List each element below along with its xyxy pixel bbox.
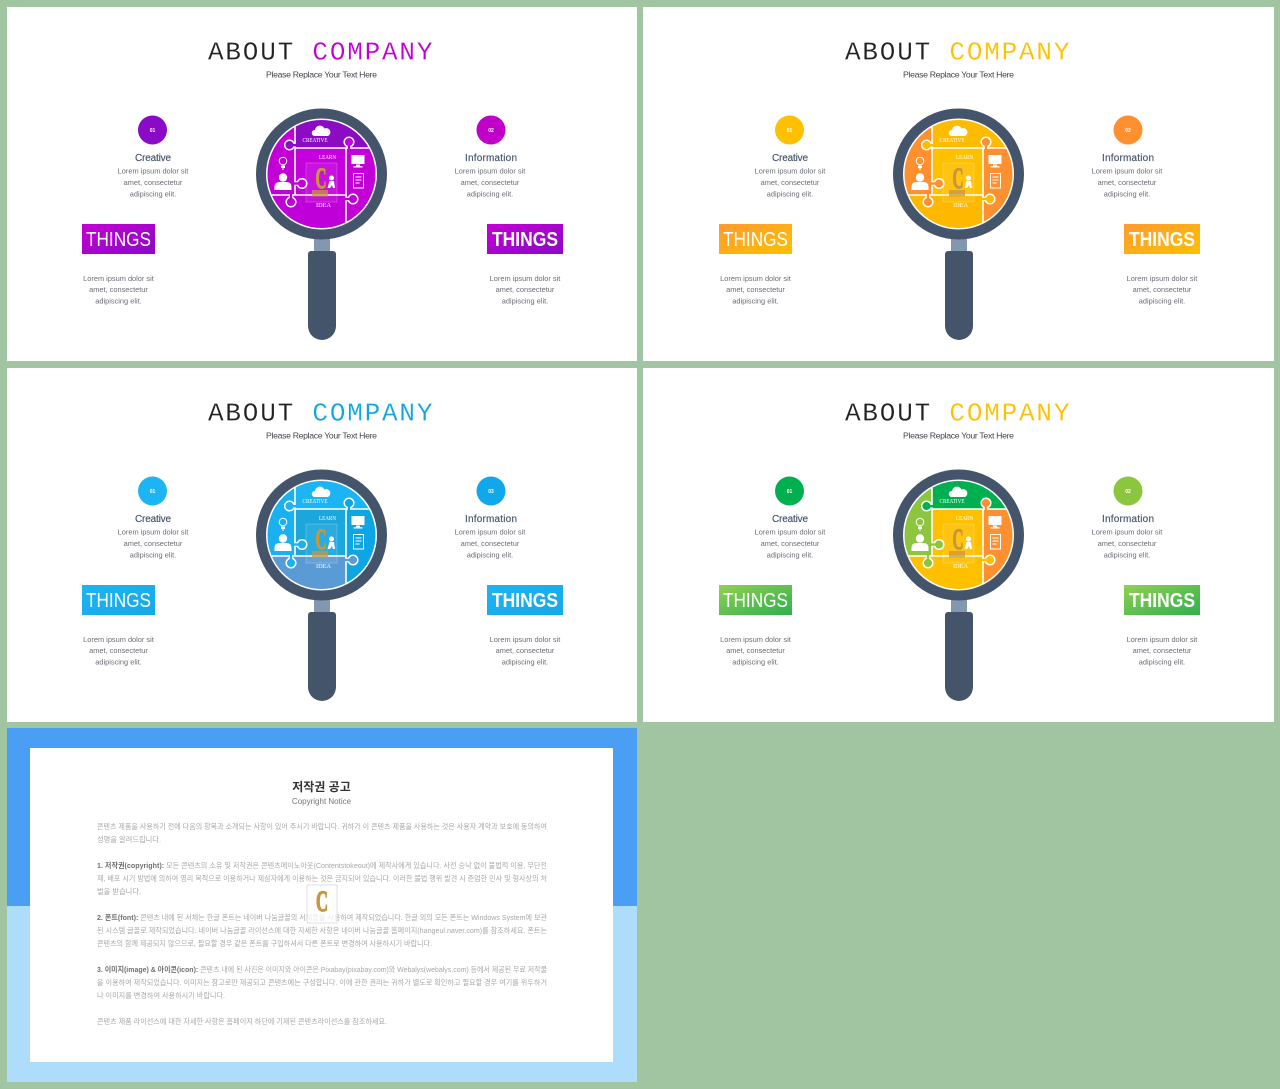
closing note: 콘텐츠 제품 라이선스에 대한 자세한 사항은 홈페이지 하단에 기재된 콘텐츠라이선스를 참조하세요. [97,1016,387,1026]
badge 01: 01 [150,489,155,495]
text block: creative: amet, consectetur [761,178,820,187]
badge 01 [775,116,804,144]
text block: creative: Lorem ipsum dolor sit [755,166,825,176]
things label left [82,585,155,615]
text block: lower left: amet, consectetur [726,646,785,655]
magnifier with puzzle: CREATIVE [302,138,328,144]
subtitle: Please Replace Your Text Here [266,430,377,440]
badge 02: 02 [488,128,494,134]
section 1 copyright: 재, 배포 시기 방법에 의하여 영리 목적으로 이용하거나 제삼자에게 이용하는 것은 금지되어 있습니다. 이러한 불법 행위 발견 시 준엄한 민사 및 형사상의 처 [97,873,547,883]
text block: lower left [720,635,791,666]
notice intro: 콘텐츠 제품을 사용하기 전에 다음의 항목과 소개되는 사항이 있어 주시기 바랍니다. 귀하가 이 콘텐츠 제품을 사용하는 것은 사용자 계약과 보호에 동의하여 [97,821,547,831]
things label left: THINGS [86,229,151,251]
things label right [1124,585,1200,615]
things label left [719,585,792,615]
things label right: THINGS [492,590,558,612]
text block: lower left: adipiscing elit. [732,296,779,306]
magnifier with puzzle: CREATIVE [940,499,965,505]
text block: creative [118,514,188,560]
text block: information: adipiscing elit. [1104,190,1150,198]
magnifier with puzzle [261,114,386,340]
section 2 font [97,912,547,948]
magnifier with puzzle: LEARN [956,155,974,161]
badge 01: 01 [150,128,155,134]
text block: information: Lorem ipsum dolor sit [1092,166,1162,176]
section 3 image and icon: 나 이미지를 변경하여 사용하시기 바랍니다. [97,990,225,1000]
magnifier with puzzle: C [953,523,963,556]
subtitle: Please Replace Your Text Here [266,70,377,80]
text block: lower right: adipiscing elit. [1139,296,1185,306]
text block: lower left: Lorem ipsum dolor sit [83,635,154,644]
badge 02: 02 [1125,128,1131,134]
section 2 font: 된 시스템 글꼴로 제작되었습니다. 네이버 나눔글꼴 라이선스에 대한 자세한 사항은 네이버 나눔글꼴 홈페이지(hangeul.naver.com)를 참조하세요. 폰트는 [97,925,547,935]
text block: lower right [1127,274,1197,306]
text block: lower right [490,635,560,666]
text block: lower left: adipiscing elit. [95,658,142,666]
text block: lower right: amet, consectetur [496,285,555,294]
section 1 copyright [97,860,547,896]
things label right [487,585,563,615]
text block: lower left [83,274,154,306]
text block: creative: adipiscing elit. [130,550,176,560]
text block: lower right [490,274,560,306]
badge 02: 03 [488,489,494,495]
magnifier with puzzle: LEARN [319,516,337,522]
text block: creative: adipiscing elit. [767,550,813,560]
section 2 font: 2. 폰트(font): 콘텐츠 내에 된 서체는 한글 폰트는 네이버 나눔글꼴의 서체들을 사용하여 제작되었습니다. 한글 외의 모든 폰트는 Windows System에 보관 [97,912,547,922]
section 3 image and icon: 을 이용하여 제작되었습니다. 이미지는 참고로만 제공되고 콘텐츠에는 구성합니다. 이에 관한 권리는 귀하가 별도로 확인하고 필요할 경우 여기를 위두하거 [97,977,547,987]
magnifier with puzzle: IDEA [953,203,969,209]
text block: information: adipiscing elit. [467,190,513,198]
subtitle: Please Replace Your Text Here [903,430,1014,440]
text block: creative: amet, consectetur [761,539,820,548]
text block: lower right [1127,635,1197,666]
magnifier with puzzle [261,474,386,701]
magnifier with puzzle: CREATIVE [940,138,965,144]
text block: creative [755,514,825,560]
text block: lower left [83,635,154,666]
magnifier with puzzle [898,114,1023,340]
text block: creative: Creative [135,514,171,525]
text block: creative: Lorem ipsum dolor sit [755,528,825,536]
text block: lower left: Lorem ipsum dolor sit [83,274,154,283]
badge 02: 02 [1125,489,1131,495]
badge 01: 01 [787,489,792,495]
text block: creative [755,153,825,198]
magnifier with puzzle: LEARN [319,155,337,161]
notice heading: 저작권 공고 [292,779,351,794]
text block: information [1092,514,1162,560]
text block: information: adipiscing elit. [1104,550,1150,560]
magnifier with puzzle: LEARN [956,516,974,522]
things label left [82,224,155,254]
title: ABOUT COMPANY [208,398,434,428]
section 1 copyright: 벌을 받습니다. [97,886,141,896]
badge 02 [476,476,506,506]
text block: lower right: amet, consectetur [496,646,555,655]
magnifier with puzzle: IDEA [953,564,969,570]
badge 01 [138,476,167,506]
things label left: THINGS [723,229,788,251]
text block: lower left: amet, consectetur [89,285,148,294]
panel: copyright notice [7,728,637,1082]
text block: lower right: amet, consectetur [1133,285,1192,294]
things label right: THINGS [1129,229,1195,251]
text block: creative: Lorem ipsum dolor sit [118,528,188,536]
notice intro: 성명을 알려드립니다. [97,834,161,844]
notice intro [97,821,547,844]
magnifier with puzzle: IDEA [316,564,332,570]
things label right [487,224,563,254]
text block: lower right: Lorem ipsum dolor sit [490,274,560,283]
text block: creative: adipiscing elit. [130,190,176,198]
text block: information: Lorem ipsum dolor sit [455,528,525,536]
text block: information: amet, consectetur [1098,178,1157,187]
logo watermark [307,885,337,923]
text block: lower right: amet, consectetur [1133,646,1192,655]
notice subheading: Copyright Notice [292,797,352,806]
text block: information: Information [465,153,517,164]
magnifier with puzzle: C [316,162,326,195]
badge 02 [1114,476,1142,506]
text block: creative: amet, consectetur [124,178,183,187]
text block: lower right: adipiscing elit. [502,296,548,306]
text block: creative [118,153,188,198]
text block: lower right: adipiscing elit. [1139,658,1185,666]
text block: lower left: amet, consectetur [726,285,785,294]
slide 3: blue [7,368,637,722]
text block: information: amet, consectetur [461,539,520,548]
text block: information: amet, consectetur [461,178,520,187]
badge 01: 01 [787,128,792,134]
text block: information [455,153,525,198]
text block: creative: adipiscing elit. [767,190,813,198]
text block: lower right: Lorem ipsum dolor sit [490,635,560,644]
text block: lower left: amet, consectetur [89,646,148,655]
text block: information: amet, consectetur [1098,539,1157,548]
text block: lower left: Lorem ipsum dolor sit [720,635,791,644]
slide 2: orange and yellow [643,7,1274,361]
title: ABOUT COMPANY [845,398,1071,428]
things label right [1124,224,1200,254]
badge 01 [138,116,167,144]
title: ABOUT COMPANY [845,38,1071,68]
text block: creative: Lorem ipsum dolor sit [118,166,188,176]
text block: information: Lorem ipsum dolor sit [1092,528,1162,536]
section 2 font: 콘텐츠의 함께 제공되지 않으므로, 필요할 경우 같은 폰트를 구입하셔서 다른 폰트로 변경하여 사용하시기 바랍니다. [97,938,432,948]
things label right: THINGS [1129,590,1195,612]
logo watermark: C [316,885,328,918]
magnifier with puzzle: C [316,523,326,556]
text block: information [1092,153,1162,198]
magnifier with puzzle [898,474,1023,701]
text block: lower left: adipiscing elit. [732,658,779,666]
text block: creative: Creative [772,514,808,525]
section 1 copyright: 1. 저작권(copyright): 모든 콘텐츠의 소유 및 저작권은 콘텐츠메이노아웃(Contentstokeout)에 제작사에게 있습니다. 사전 승낙 없이 불법적 이용, 무단전 [97,860,547,870]
section 3 image and icon [97,964,547,1000]
things label left: THINGS [723,590,788,612]
badge 02 [1114,116,1142,144]
title: ABOUT COMPANY [208,38,434,68]
text block: lower right: Lorem ipsum dolor sit [1127,635,1197,644]
things label left [719,224,792,254]
text block: information: Information [1102,153,1154,164]
magnifier with puzzle: C [953,162,963,195]
text block: lower right: Lorem ipsum dolor sit [1127,274,1197,283]
text block: creative: Creative [772,153,808,164]
slide 1: magenta [7,7,637,361]
text block: information: Lorem ipsum dolor sit [455,166,525,176]
badge 01 [775,476,804,506]
things label left: THINGS [86,590,151,612]
subtitle: Please Replace Your Text Here [903,70,1014,80]
text block: information: Information [1102,514,1154,525]
text block: creative: amet, consectetur [124,539,183,548]
slide 4: green and yellow [643,368,1274,722]
text block: lower left: adipiscing elit. [95,296,142,306]
text block: information: adipiscing elit. [467,550,513,560]
things label right: THINGS [492,229,558,251]
magnifier with puzzle: IDEA [316,203,332,209]
text block: information: Information [465,514,517,525]
text block: information [455,514,525,560]
text block: creative: Creative [135,153,171,164]
section 3 image and icon: 3. 이미지(image) & 아이콘(icon): 콘텐츠 내에 된 사진은 이미지와 아이콘은 Pixabay(pixabay.com)와 Webalys(webalys.com) 등에서 제공된 무료 저작물 [97,964,547,974]
text block: lower left: Lorem ipsum dolor sit [720,274,791,283]
badge 02 [476,116,506,144]
magnifier with puzzle: CREATIVE [302,499,328,505]
text block: lower left [720,274,791,306]
text block: lower right: adipiscing elit. [502,658,548,666]
